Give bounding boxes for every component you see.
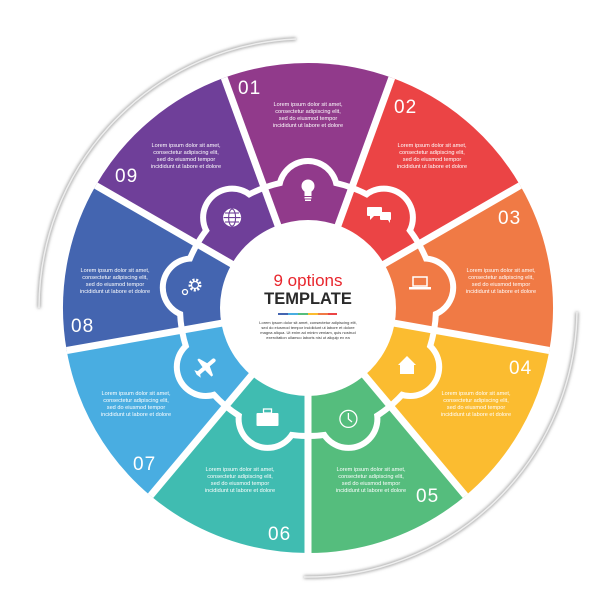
body texts: consectetur adipiscing elit, (468, 275, 534, 281)
center body text: Lorem ipsum dolor sit amet, consectetur adipiscing elit, (259, 320, 357, 325)
body texts: incididunt ut labore et dolore (273, 123, 343, 129)
icon: lightbulb (302, 180, 314, 201)
body texts: sed do eiusmod tempor (211, 481, 269, 487)
icon: gears (182, 280, 200, 294)
body texts: consectetur adipiscing elit, (399, 150, 465, 156)
center title: 9 options (274, 271, 342, 290)
body texts: sed do eiusmod tempor (86, 282, 144, 288)
body texts: sed do eiusmod tempor (342, 481, 400, 487)
body texts: Lorem ipsum dolor sit amet, (336, 467, 406, 473)
body texts: Lorem ipsum dolor sit amet, (466, 268, 536, 274)
numbers: 05 (416, 486, 439, 507)
numbers: 01 (238, 78, 261, 99)
body texts: consectetur adipiscing elit, (153, 150, 219, 156)
icon: globe (224, 209, 241, 226)
body texts: consectetur adipiscing elit, (443, 398, 509, 404)
body texts: sed do eiusmod tempor (279, 116, 337, 122)
scalloped white ring (160, 158, 456, 451)
center title (264, 271, 352, 308)
icon: chat bubbles (367, 207, 391, 223)
color bar (278, 313, 337, 315)
body texts: sed do eiusmod tempor (157, 157, 215, 163)
center body text: magna aliqua. Ut enim ad minim veniam, quis nostrud (260, 330, 356, 335)
body texts: incididunt ut labore et dolore (466, 289, 536, 295)
body texts: Lorem ipsum dolor sit amet, (101, 391, 171, 397)
center body text: sed do eiusmod tempor incididunt ut labore et dolore (261, 325, 355, 330)
numbers: 09 (115, 166, 138, 187)
icon: house (398, 356, 416, 374)
numbers: 04 (509, 358, 532, 379)
body texts: Lorem ipsum dolor sit amet, (80, 268, 150, 274)
center circle (220, 220, 396, 396)
body texts: incididunt ut labore et dolore (441, 412, 511, 418)
body texts: incididunt ut labore et dolore (80, 289, 150, 295)
numbers: 02 (394, 97, 417, 118)
body texts: Lorem ipsum dolor sit amet, (151, 143, 221, 149)
icon: airplane (190, 351, 222, 383)
body texts: Lorem ipsum dolor sit amet, (441, 391, 511, 397)
body texts: incididunt ut labore et dolore (397, 164, 467, 170)
icon: clock (340, 410, 357, 427)
body texts: Lorem ipsum dolor sit amet, (205, 467, 275, 473)
numbers: 08 (71, 316, 94, 337)
body texts: consectetur adipiscing elit, (207, 474, 273, 480)
center title: TEMPLATE (264, 290, 352, 308)
body texts: sed do eiusmod tempor (403, 157, 461, 163)
numbers (71, 78, 532, 545)
body texts (80, 102, 536, 494)
body texts: sed do eiusmod tempor (472, 282, 530, 288)
body texts: incididunt ut labore et dolore (101, 412, 171, 418)
center body text (259, 320, 357, 340)
body texts: Lorem ipsum dolor sit amet, (273, 102, 343, 108)
inner segments (166, 164, 450, 445)
body texts: consectetur adipiscing elit, (82, 275, 148, 281)
body texts: sed do eiusmod tempor (107, 405, 165, 411)
wheel segments (63, 63, 553, 553)
body texts: Lorem ipsum dolor sit amet, (397, 143, 467, 149)
body texts: incididunt ut labore et dolore (336, 488, 406, 494)
icon: laptop (409, 277, 431, 290)
body texts: consectetur adipiscing elit, (275, 109, 341, 115)
body texts: sed do eiusmod tempor (447, 405, 505, 411)
body texts: consectetur adipiscing elit, (103, 398, 169, 404)
numbers: 03 (498, 208, 521, 229)
numbers: 06 (268, 524, 291, 545)
center body text: exercitation ullamco laboris nisi ut aliquip ex ea (266, 335, 350, 340)
icon: briefcase (256, 409, 278, 426)
numbers: 07 (133, 454, 156, 475)
body texts: incididunt ut labore et dolore (151, 164, 221, 170)
body texts: consectetur adipiscing elit, (338, 474, 404, 480)
decorative outer arcs (39, 39, 577, 577)
body texts: incididunt ut labore et dolore (205, 488, 275, 494)
